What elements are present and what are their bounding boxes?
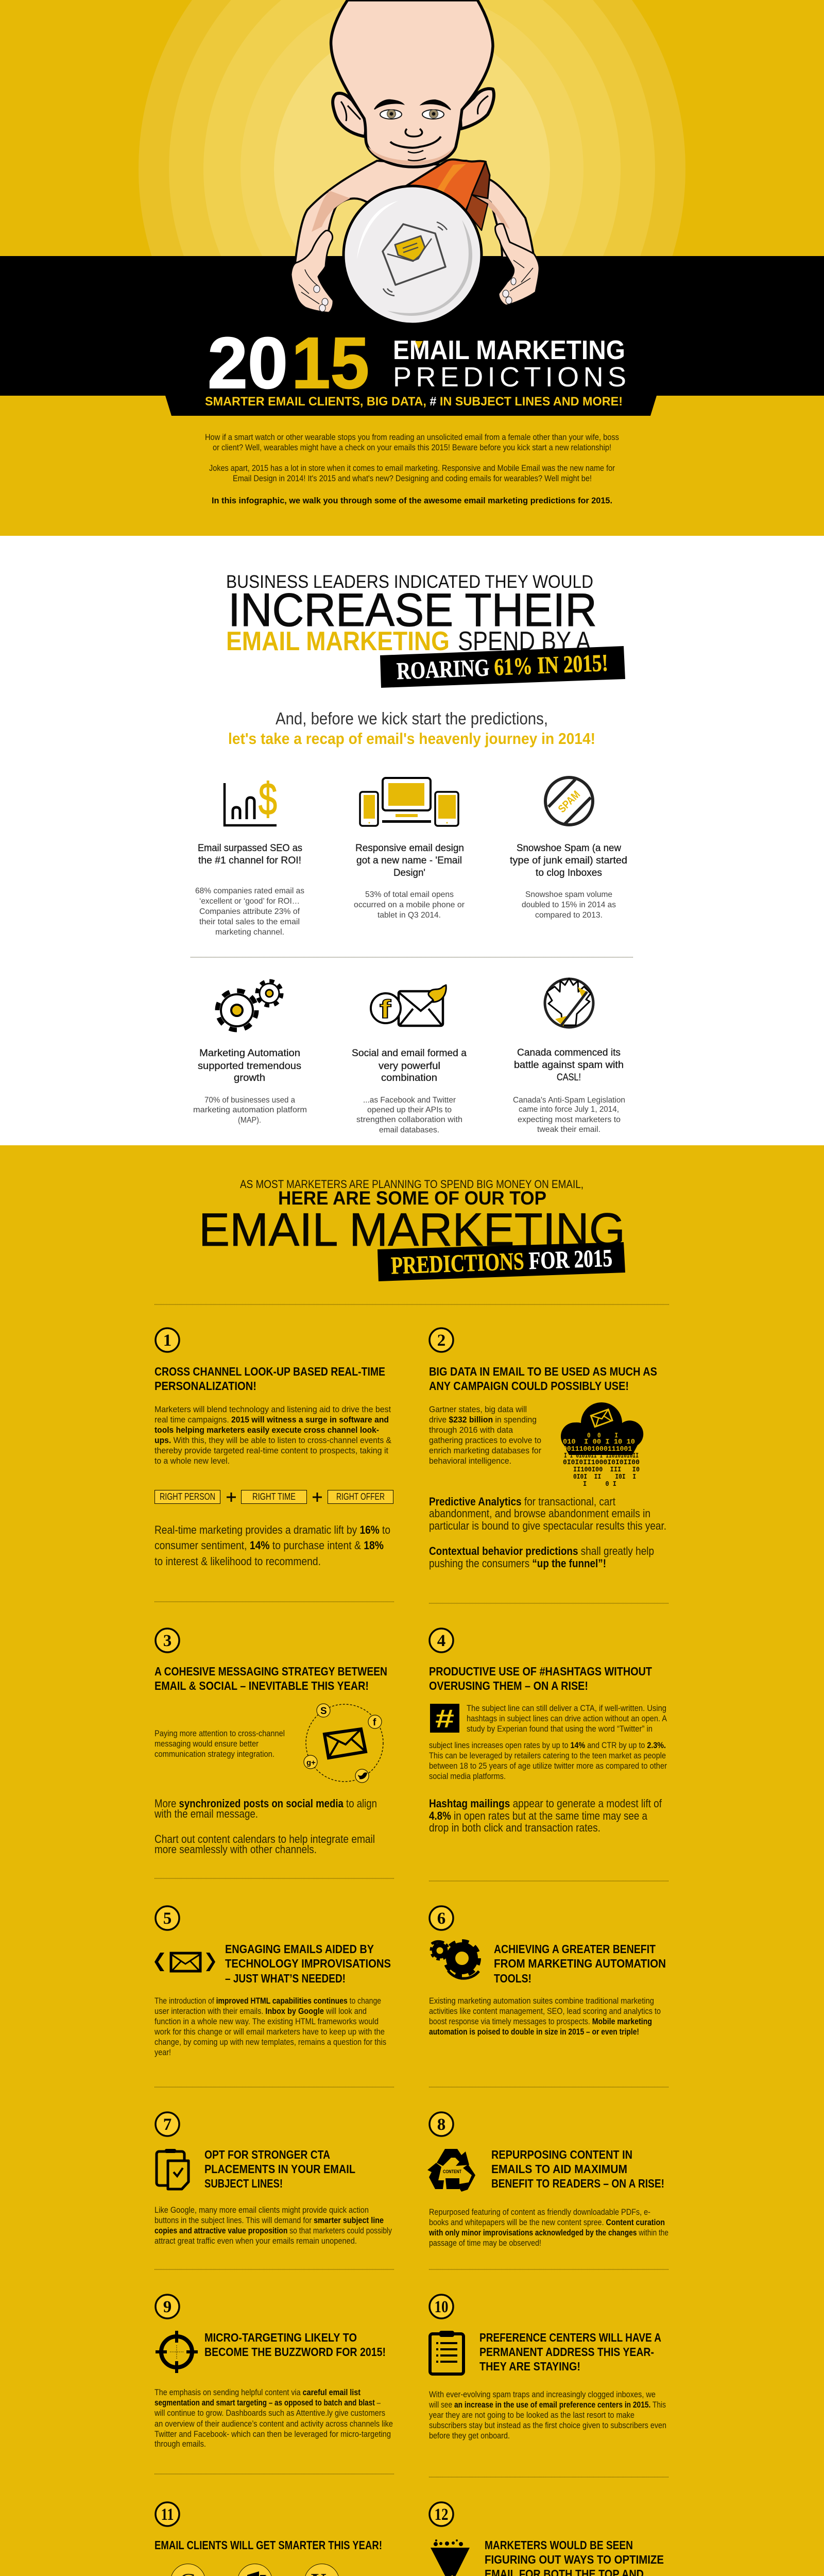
intro text: Email Design in 2014! It's 2015 and what's new? Designing and coding emails for wearables? Well might be! [233, 473, 592, 483]
heading 12: MARKETERS WOULD BE SEEN [485, 2538, 633, 2552]
body 10 [428, 2389, 666, 2441]
body 5: The introduction of improved HTML capabilities continues to change [154, 1996, 381, 2006]
body 4 [429, 1703, 667, 1781]
icon: data cloud: II100I00 III I0 [573, 1466, 640, 1474]
prediction 4 [429, 1629, 667, 1834]
recap: marketing automation: (MAP). [238, 1116, 261, 1125]
recap: responsive email design: Design' [393, 868, 425, 878]
body 9: segmentation and smart targeting – as opposed to batch and blast – [154, 2398, 381, 2408]
heading 11: EMAIL CLIENTS WILL GET SMARTER THIS YEAR! [154, 2538, 382, 2552]
prediction 9 [154, 2295, 393, 2449]
stat paragraphs 2: pushing the consumers “up the funnel”! [429, 1557, 606, 1570]
heading 2: BIG DATA IN EMAIL TO BE USED AS MUCH AS [429, 1365, 657, 1378]
body 10: subscribers stay but instead as the first choice given to subscribers even [429, 2420, 666, 2430]
heading 7: PLACEMENTS IN YOUR EMAIL [204, 2162, 355, 2176]
body 7: Like Google, many more email clients might provide quick action [154, 2205, 369, 2215]
recap: social and email [352, 1048, 467, 1134]
body 7: buttons in the subject lines. This will demand for smarter subject line [154, 2215, 384, 2225]
recap: marketing automation: Marketing Automation [199, 1048, 300, 1059]
title: email marketing predictions: EMAIL MARKETING [393, 335, 625, 365]
heading 3: EMAIL & SOCIAL – INEVITABLE THIS YEAR! [154, 1679, 369, 1692]
body 5: work for this change or will email marketers have to keep up with the [154, 2027, 385, 2037]
heading: top email marketing predictions: EMAIL MARKETING [199, 1204, 625, 1256]
prediction 7 [154, 2112, 392, 2246]
heading 8: EMAILS TO AID MAXIMUM [491, 2162, 627, 2176]
heading: top email marketing predictions: AS MOST MARKETERS ARE PLANNING TO SPEND BIG MONEY ON EMAIL, [240, 1178, 583, 1191]
recap: social and email: combination [381, 1073, 437, 1083]
heading 6: FROM MARKETING AUTOMATION [494, 1957, 666, 1970]
heading 4 [429, 1665, 652, 1692]
body 10: will see an increase in the use of email preference centers in 2015. This [428, 2400, 666, 2410]
body 4: hashtags in subject lines can drive action without an open. A [467, 1714, 667, 1723]
body 1: thereby provide targeted real-time content to prospects, taking it [154, 1446, 388, 1455]
body 5: change, by coming up with new templates, remains a question for this [154, 2037, 386, 2047]
heading: business leaders [226, 572, 625, 688]
heading 10: PERMANENT ADDRESS THIS YEAR- [479, 2345, 654, 2359]
body 5: function in a whole new way. The existing HTML frameworks would [154, 2016, 379, 2026]
title: 2015 [208, 322, 369, 403]
heading 1: CROSS CHANNEL LOOK-UP BASED REAL-TIME [154, 1365, 385, 1378]
heading 7: OPT FOR STRONGER CTA [204, 2148, 330, 2161]
heading 8: REPURPOSING CONTENT IN [491, 2148, 632, 2161]
body 2 [429, 1404, 541, 1466]
icon: data cloud: I I 0I0I0II I II0I0I0I0II [564, 1452, 639, 1460]
heading 3: A COHESIVE MESSAGING STRATEGY BETWEEN [154, 1665, 387, 1678]
number 7: 7 [163, 2115, 171, 2134]
body 1: Marketers will blend technology and listening aid to drive the best [154, 1404, 391, 1414]
heading: business leaders: SPEND BY A [458, 626, 591, 656]
recap: Canada CASL: Canada's Anti-Spam Legislation [513, 1096, 625, 1105]
recap: email surpassed SEO: ‘excellent or ‘good’ for ROI… [199, 897, 300, 906]
icon: data cloud [561, 1402, 643, 1488]
number 8: 8 [437, 2115, 445, 2134]
prediction 12 [429, 2502, 668, 2576]
recap: social and email: email databases. [379, 1126, 439, 1134]
recap: email surpassed SEO: marketing channel. [215, 928, 284, 937]
body 6: activities like content management, SEO, lead scoring and analytics to [429, 2006, 661, 2016]
recap: snowshoe spam: to clog Inboxes [536, 868, 602, 878]
prediction 11 [154, 2502, 393, 2576]
heading 4: PRODUCTIVE USE OF #HASHTAGS WITHOUT [429, 1665, 652, 1678]
stat paragraph 1: consumer sentiment, 14% to purchase intent & 18% [154, 1539, 384, 1552]
recap: snowshoe spam [510, 843, 627, 920]
recap: marketing automation: supported tremendous [198, 1061, 301, 1072]
body 8: with only minor improvisations acknowledged by the changes within the [428, 2228, 668, 2238]
body 4: This can be leveraged by retailers catering to the teen market as people [429, 1751, 666, 1760]
stat paragraphs 3: More synchronized posts on social media to align [154, 1797, 377, 1810]
heading 5: – JUST WHAT’S NEEDED! [225, 1972, 346, 1985]
body 9: Twitter and Facebook- which can then be leveraged for micro-targeting [154, 2429, 391, 2439]
body 6 [429, 1996, 661, 2037]
prediction 6 [429, 1906, 666, 2037]
stat paragraphs 2: Contextual behavior predictions shall greatly help [429, 1545, 654, 1557]
recap: responsive email design: tablet in Q3 2014. [377, 911, 441, 920]
recap: snowshoe spam: Snowshoe spam volume [525, 890, 612, 899]
heading 3 [154, 1665, 387, 1692]
prediction 1 [154, 1328, 393, 1568]
heading 5: TECHNOLOGY IMPROVISATIONS [225, 1957, 391, 1970]
number 2: 2 [437, 1331, 445, 1350]
recap: marketing automation: 70% of businesses used a [204, 1096, 295, 1105]
icon: social orbit around envelope: g+ [306, 1758, 316, 1767]
icon: chart with dollar [225, 773, 277, 825]
recap: Canada CASL: expecting most marketers to [518, 1115, 621, 1124]
heading 1: PERSONALIZATION! [154, 1379, 256, 1393]
intro text: Jokes apart, 2015 has a lot in store when it comes to email marketing. Responsive and Mobile Email was the new name for [209, 463, 615, 473]
number 12: 12 [435, 2505, 448, 2524]
stat paragraph 4: Hashtag mailings appear to generate a modest lift of [429, 1797, 662, 1810]
body 1: tools helping marketers easily execute cross channel look- [154, 1425, 379, 1435]
icon: preference clipboard [430, 2331, 464, 2374]
subtitle tagline: SMARTER EMAIL CLIENTS, BIG DATA, # IN SUBJECT LINES AND MORE! [205, 395, 623, 409]
stat paragraphs 2: particular is bound to give spectacular results this year. [429, 1519, 666, 1532]
banner: roaring 61%: ROARING 61% IN 2015! [396, 650, 609, 685]
body 2: through 2016 with data [429, 1425, 513, 1435]
icon: spam [545, 777, 593, 825]
body 5: user interaction with their emails. Inbox by Google will look and [154, 2006, 367, 2016]
heading 7: SUBJECT LINES! [204, 2177, 283, 2190]
icon: data cloud: 0 0 I [587, 1432, 618, 1440]
body 4: between 18 to 25 years of age utilize twitter more as compared to other [429, 1761, 667, 1771]
recap: social and email: strengthen collaboration with [356, 1115, 462, 1124]
recap: snowshoe spam: type of junk email) started [510, 855, 627, 866]
number 9: 9 [163, 2298, 171, 2316]
icon: spam: SPAM [556, 789, 582, 815]
heading 8: BENEFIT TO READERS – ON A RISE! [491, 2177, 664, 2190]
body 2: Gartner states, big data will [429, 1404, 527, 1414]
recap: email surpassed SEO: the #1 channel for ROI! [198, 855, 301, 866]
recap: responsive email design: 53% of total email opens [365, 890, 454, 899]
recap: snowshoe spam: doubled to 15% in 2014 as [522, 901, 616, 909]
recap: responsive email design [354, 843, 465, 920]
heading 7 [204, 2148, 355, 2190]
body 10: before they get onboard. [429, 2431, 510, 2441]
icon: automation gears [431, 1941, 479, 1978]
recap: Canada CASL [513, 1047, 625, 1134]
number 1 [156, 1328, 179, 1352]
heading 12 [485, 2538, 664, 2576]
body 8: passage of time may be observed! [429, 2238, 541, 2248]
recap: social and email: Social and email formed a [352, 1048, 467, 1059]
body 3 [154, 1728, 285, 1759]
icon: social orbit around envelope: S [320, 1706, 327, 1717]
number 7 [156, 2112, 179, 2136]
body 6: automation is poised to double in size in 2015 – or even triple! [429, 2027, 639, 2037]
icon: facebook twitter email: f [380, 995, 391, 1024]
number 12 [430, 2502, 453, 2526]
stat paragraph 4 [429, 1797, 662, 1834]
number 5 [156, 1906, 179, 1930]
heading 4: OVERUSING THEM – ON A RISE! [429, 1679, 588, 1692]
body 1: real time campaigns. 2015 will witness a surge in software and [154, 1415, 389, 1425]
title: 2015: 15 [291, 322, 369, 403]
panel: predictions background [0, 1145, 824, 2576]
heading: business leaders: EMAIL MARKETING [226, 626, 450, 656]
heading 5 [225, 1942, 391, 1985]
number 4 [430, 1629, 453, 1652]
heading 1 [154, 1365, 385, 1393]
title: 2015: 20 [208, 322, 288, 403]
number 11: 11 [161, 2505, 174, 2524]
heading 10 [479, 2331, 661, 2373]
body 3: Paying more attention to cross-channel [154, 1728, 285, 1738]
heading 6: TOOLS! [494, 1972, 531, 1985]
number 8 [430, 2112, 453, 2136]
icon: responsive devices [360, 778, 458, 826]
icon: email clients chain [171, 2564, 339, 2576]
stat paragraphs 3: with the email message. [154, 1807, 258, 1820]
heading 6: ACHIEVING A GREATER BENEFIT [494, 1942, 656, 1956]
body 2: drive $232 billion in spending [429, 1415, 537, 1425]
number 1: 1 [163, 1331, 171, 1350]
body 9 [154, 2387, 393, 2449]
intro text: In this infographic, we walk you through some of the awesome email marketing predictions for 2015. [212, 496, 612, 505]
body 10: With ever-evolving spam traps and increasingly clogged inboxes, we [429, 2389, 656, 2399]
title: email marketing predictions [393, 335, 626, 393]
recap: Canada CASL: CASL! [557, 1072, 581, 1083]
icon: data cloud: 0I0I II I0I I [573, 1473, 636, 1481]
icon: coded envelope [154, 1953, 215, 1971]
heading 2: ANY CAMPAIGN COULD POSSIBLY USE! [429, 1379, 629, 1393]
icon: funnel [431, 2539, 470, 2576]
icon: data cloud: 00111001000111001 0 [563, 1445, 640, 1453]
body 6: Existing marketing automation suites combine traditional marketing [429, 1996, 654, 2006]
stat paragraphs 3: more seamlessly with other channels. [154, 1843, 317, 1856]
recap: email surpassed SEO: 68% companies rated email as [195, 887, 304, 895]
icon: chart with dollar: $ [259, 773, 277, 824]
icon: hash box [430, 1704, 459, 1733]
body 7: copies and attractive value proposition so that marketers could possibly [154, 2226, 392, 2235]
recap: social and email: opened up their APIs to [367, 1106, 452, 1114]
recap: social and email: very powerful [379, 1061, 440, 1072]
body 4: study by Experian found that using the word “Twitter” in [467, 1724, 653, 1734]
number 6 [430, 1906, 453, 1930]
stat paragraph 4: drop in both click and transaction rates. [429, 1821, 600, 1834]
right person + right time + right offer: RIGHT PERSON [160, 1492, 215, 1502]
icon: hash box: # [435, 1704, 454, 1733]
body 9: through emails. [154, 2439, 206, 2449]
stat paragraph 1: to interest & likelihood to recommend. [154, 1555, 321, 1568]
icon: facebook twitter email [371, 985, 446, 1026]
heading 12: FIGURING OUT WAYS TO OPTIMIZE [485, 2553, 664, 2566]
recap: marketing automation [193, 1048, 307, 1125]
icon: data cloud: 0I0I0II1000I0I0II00 [563, 1459, 640, 1467]
recap: Canada CASL: Canada commenced its [517, 1047, 621, 1058]
number 3 [156, 1629, 179, 1652]
recap: email surpassed SEO: Email surpassed SEO as [198, 843, 302, 854]
body 10: year they are not going to be looked as the last resort to make [429, 2410, 634, 2420]
number 10: 10 [435, 2298, 448, 2316]
icon: recycle content [427, 2149, 475, 2192]
body 7 [154, 2205, 392, 2246]
body 2: enrich marketing databases for [429, 1446, 541, 1455]
recap: snowshoe spam: Snowshoe Spam (a new [517, 843, 621, 854]
body 3: messaging would ensure better [154, 1739, 259, 1749]
body 8: books and whitepapers will be the new content spree. Content curation [429, 2217, 665, 2227]
stat paragraph 1: Real-time marketing provides a dramatic lift by 16% to [154, 1523, 390, 1536]
body 2: gathering practices to evolve to [429, 1435, 541, 1445]
panel: hero header [0, 0, 824, 536]
body 1 [154, 1404, 392, 1466]
icon: gears [217, 981, 282, 1030]
heading 10: PREFERENCE CENTERS WILL HAVE A [479, 2331, 661, 2344]
body 1: ups. With this, they will be able to listen to cross-channel events & [154, 1435, 392, 1445]
body 4: subject lines increases open rates by up to 14% and CTR by up to 2.3%. [429, 1740, 666, 1750]
stat paragraphs 2: Predictive Analytics for transactional, cart [429, 1495, 615, 1508]
stat paragraphs 3: Chart out content calendars to help integrate email [154, 1833, 375, 1845]
icon: social orbit around envelope [304, 1704, 383, 1783]
intro text [205, 432, 619, 505]
body 7: attract great traffic even when your emails remain unopened. [154, 2236, 357, 2246]
heading 10: THEY ARE STAYING! [479, 2360, 580, 2373]
heading 5: ENGAGING EMAILS AIDED BY [225, 1942, 374, 1956]
recap: email surpassed SEO: their total sales to the email [199, 918, 300, 926]
right person + right time + right offer: RIGHT TIME [252, 1492, 296, 1502]
heading: recap of 2014 [228, 709, 595, 748]
recap: Canada CASL: tweak their email. [537, 1125, 600, 1134]
body 2: behavioral intelligence. [429, 1456, 511, 1466]
body 9: will continue to grow. Dashboards such as Attentive.ly give customers [154, 2408, 385, 2418]
intro text: or client? Well, wearables might have a check on your emails this 2015! Beware before you kick start a new relationship! [213, 443, 611, 452]
stat paragraphs 2 [429, 1495, 666, 1570]
prediction 8 [427, 2112, 668, 2248]
body 5 [154, 1996, 386, 2057]
heading: top email marketing predictions: HERE ARE SOME OF OUR TOP [278, 1188, 546, 1209]
number 3: 3 [163, 1632, 171, 1650]
heading: business leaders: INCREASE THEIR [228, 584, 597, 636]
recap: responsive email design: got a new name - 'Email [356, 855, 462, 866]
number 11 [156, 2502, 179, 2526]
body 5: year! [154, 2047, 171, 2057]
stat paragraph 1 [154, 1523, 390, 1568]
heading: top email marketing predictions [199, 1178, 625, 1281]
banner: predictions for 2015: PREDICTIONS FOR 2015 [390, 1245, 613, 1279]
body 1: to a whole new level. [154, 1456, 230, 1466]
icon: data cloud: I 0 I [583, 1480, 616, 1488]
heading 9: MICRO-TARGETING LIKELY TO [204, 2331, 357, 2344]
body 4: The subject line can still deliver a CTA, if well-written. Using [467, 1703, 666, 1713]
icon: clipboard and document [157, 2149, 188, 2189]
number 6: 6 [437, 1909, 445, 1928]
stat paragraph 4: 4.8% in open rates but at the same time may see a [429, 1809, 648, 1822]
heading 8 [491, 2148, 664, 2190]
body 3: communication strategy integration. [154, 1749, 274, 1759]
recap: Canada CASL: came into force July 1, 2014, [519, 1105, 619, 1114]
prediction 5 [154, 1906, 391, 2057]
recap: email surpassed SEO [195, 843, 304, 937]
right person + right time + right offer [154, 1490, 393, 1503]
body 9: The emphasis on sending helpful content via careful email list [154, 2387, 360, 2397]
number 9 [156, 2295, 179, 2318]
stat paragraphs 2: abandonment, and browse abandonment emails in [429, 1507, 650, 1520]
icon: recycle content: CONTENT [443, 2169, 461, 2174]
icon: crosshair target [156, 2331, 198, 2373]
number 2 [430, 1328, 453, 1352]
recap: email surpassed SEO: Companies attribute 23% of [199, 907, 300, 916]
recap: snowshoe spam: compared to 2013. [535, 911, 603, 920]
heading 2 [429, 1365, 657, 1393]
number 4: 4 [437, 1632, 445, 1650]
icon: data cloud: 010 I 00 I 10 10 [563, 1438, 635, 1446]
heading: recap of 2014: let's take a recap of email's heavenly journey in 2014! [228, 730, 595, 748]
recap: responsive email design: occurred on a mobile phone or [354, 901, 465, 909]
body 8: Repurposed featuring of content as friendly downloadable PDFs, e- [429, 2207, 650, 2217]
prediction 3 [154, 1629, 387, 1856]
recap: social and email: ...as Facebook and Twitter [363, 1096, 456, 1105]
heading: recap of 2014: And, before we kick start the predictions, [276, 709, 548, 728]
prediction 10 [428, 2295, 666, 2441]
heading 9 [204, 2331, 386, 2359]
icon: social orbit around envelope: f [373, 1717, 376, 1728]
recap: Canada CASL: battle against spam with [514, 1060, 624, 1071]
number 5: 5 [163, 1909, 171, 1928]
illustration: monk holding plate [291, 0, 539, 324]
number 10 [430, 2295, 453, 2318]
prediction 2 [429, 1328, 666, 1570]
right person + right time + right offer: RIGHT OFFER [336, 1492, 385, 1502]
body 9: an overview of their audience’s content and activity across channels like [154, 2419, 393, 2429]
body 8 [428, 2207, 668, 2248]
recap: marketing automation: marketing automation platform [193, 1106, 307, 1114]
title: email marketing predictions: PREDICTIONS [393, 362, 626, 393]
heading 6 [494, 1942, 666, 1985]
heading: business leaders: BUSINESS LEADERS INDICATED THEY WOULD [226, 572, 593, 592]
heading 9: BECOME THE BUZZWORD FOR 2015! [204, 2345, 386, 2359]
recap: marketing automation: growth [234, 1073, 265, 1083]
body 6: boost response via timely messages to prospects. Mobile marketing [429, 2016, 652, 2026]
stat paragraphs 3 [154, 1797, 377, 1856]
intro text: How if a smart watch or other wearable stops you from reading an unsolicited email from a female other than your wife, boss [205, 432, 619, 442]
recap: responsive email design: Responsive email design [355, 843, 464, 854]
body 4: social media platforms. [429, 1771, 506, 1781]
icon: Canada anti-spam [545, 978, 593, 1027]
